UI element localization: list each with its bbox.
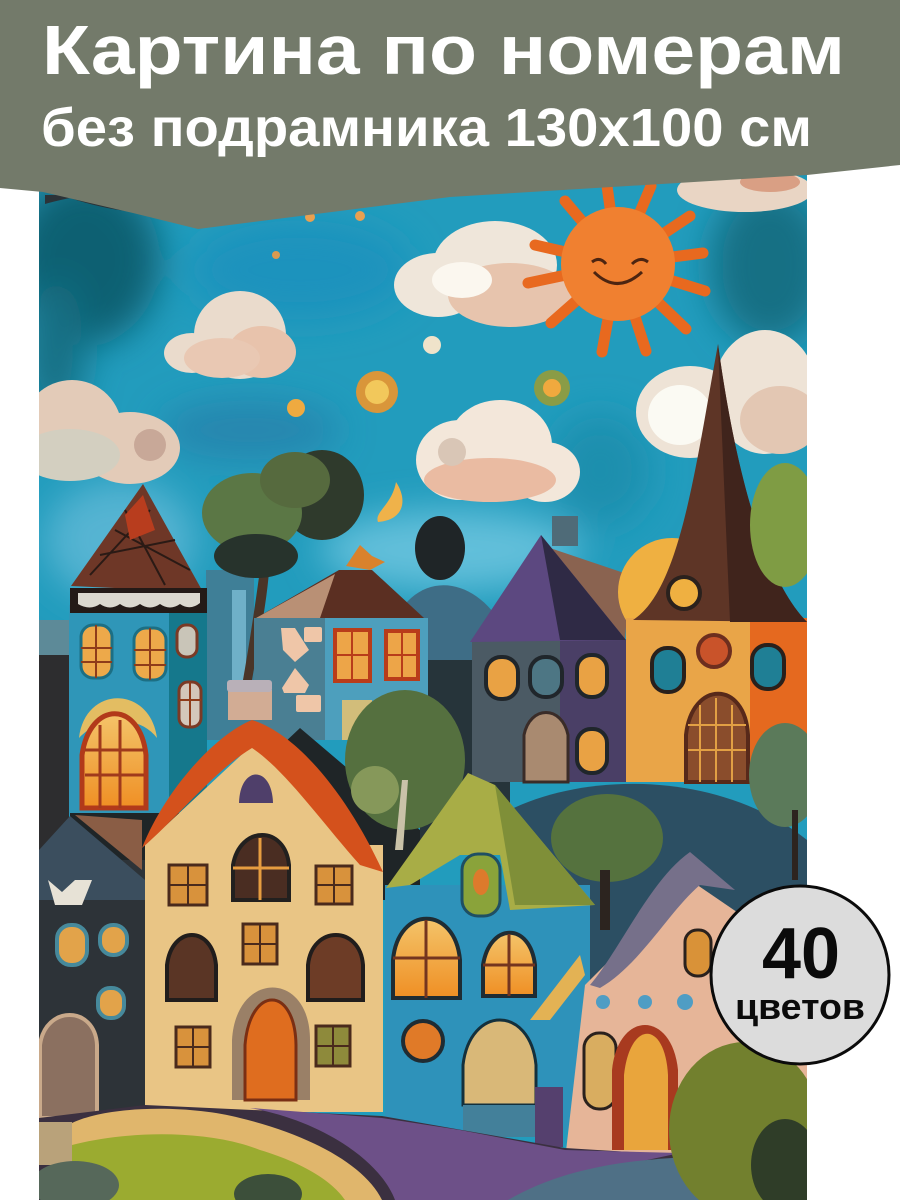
house: purple [470,516,630,782]
house: blue with conical roof [69,484,207,815]
cloud: top left stub [45,195,124,211]
cloud: top right corner [677,176,807,212]
cloud: right [636,330,820,458]
badge: 40 colours: цветов [735,986,865,1027]
house: dark left [39,815,147,1122]
painting [10,168,830,1200]
tree: right edge lower [749,723,807,880]
dark hill with bushes [514,784,807,980]
background columns between houses [39,570,510,855]
cloud: upper centre [394,221,572,327]
cloud: centre [416,400,580,502]
title: Картина по номерам [42,11,845,89]
header band [0,0,900,229]
house: blue front with green roof [385,773,595,1147]
ground: lawn and road [31,1105,720,1200]
sun [528,186,705,352]
cloud: left edge [39,380,180,484]
small flowers in the sky [272,211,570,417]
bush: bottom right [669,1042,821,1200]
tree: large behind houses [202,450,364,680]
badge: 40 colours [711,886,889,1064]
subtitle: без подрамника 130х100 см [41,98,812,158]
tree: right edge upper [750,463,807,587]
badge: 40 colours: 40 [762,914,840,994]
tree: centre [345,690,465,850]
hill behind houses [407,585,492,660]
dark bush and moon [377,482,465,580]
house: cream with orange roof [142,680,383,1112]
house: orange with spire [618,344,807,782]
house: middle blue [254,545,428,740]
cloud: left small [164,291,296,379]
house: pink right [565,852,807,1160]
dark fill behind front houses [70,728,420,900]
